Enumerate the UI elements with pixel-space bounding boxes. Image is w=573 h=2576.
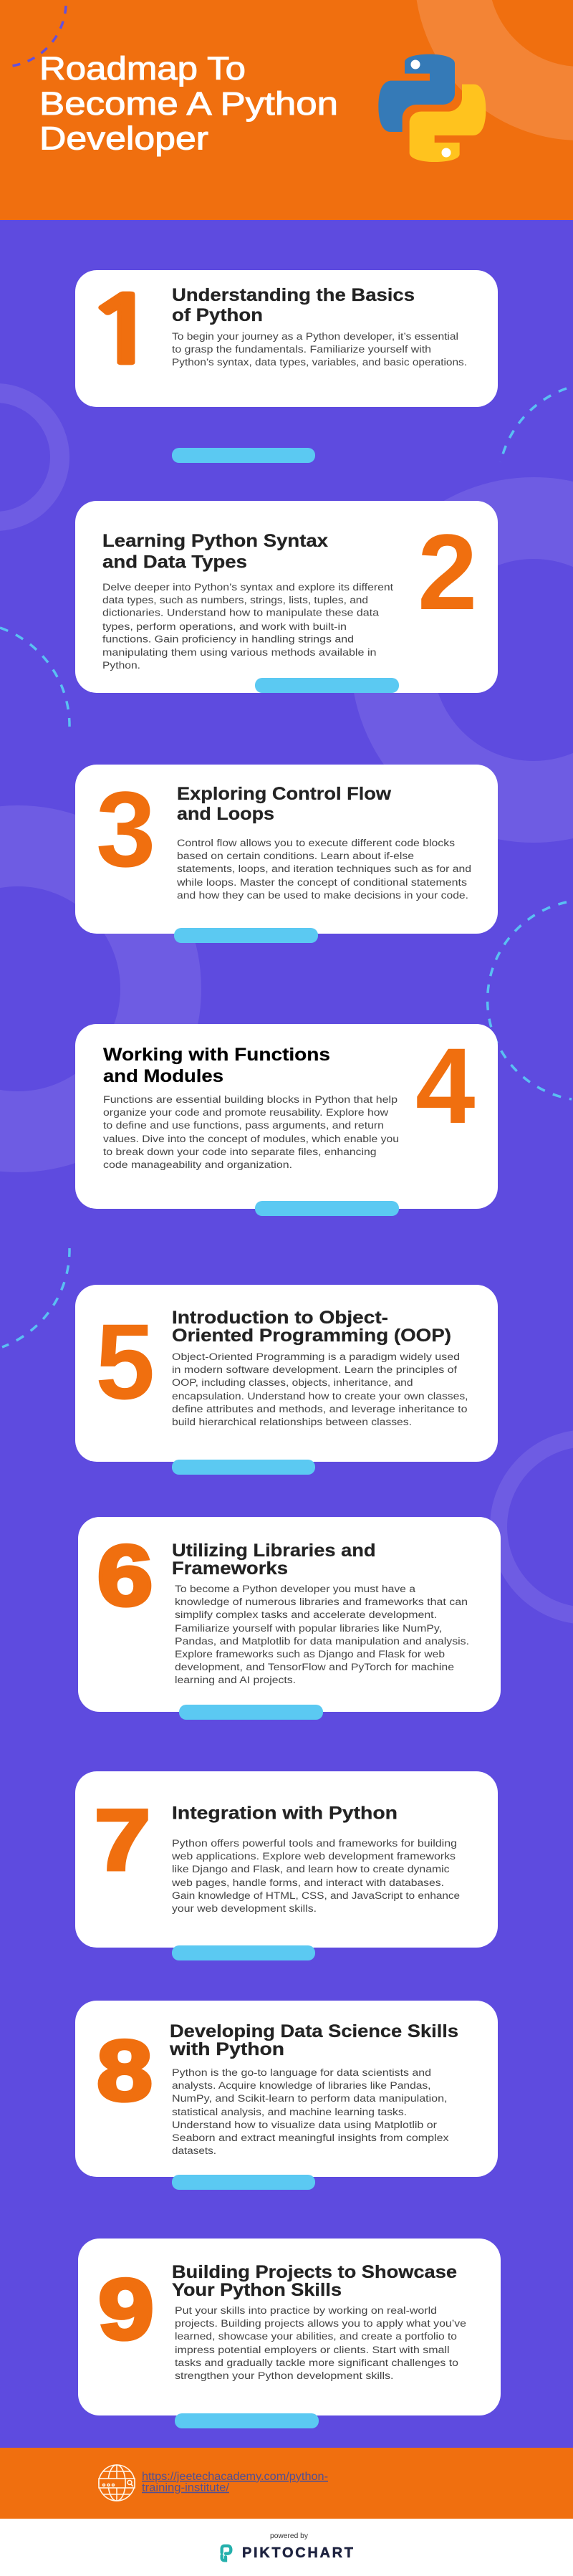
heading: Developing Data Science Skills [170, 2021, 458, 2041]
body text: to define and use functions, pass arguments, and return [103, 1120, 384, 1131]
body text: Put your skills into practice by working on real-world [175, 2305, 437, 2317]
body text: statements, loops, and iteration techniques such as for and [177, 863, 471, 875]
body text: Seaborn and extract meaningful insights from complex [172, 2132, 448, 2144]
panel: step 9 [78, 2239, 501, 2428]
pill [179, 1705, 323, 1720]
icon: piktochart mark [222, 2546, 231, 2560]
body text [175, 2305, 466, 2382]
heading: and Data Types [102, 552, 247, 572]
link: training-institute/ [142, 2482, 230, 2494]
body text: web pages, handle forms, and interact with databases. [171, 1877, 444, 1889]
body text: Python offers powerful tools and frameworks for building [172, 1838, 457, 1849]
body text: dictionaries. Understand how to manipulate these data [102, 608, 379, 619]
number 8: 8 [97, 2023, 153, 2119]
heading: Your Python Skills [172, 2280, 342, 2300]
body text: datasets. [172, 2145, 216, 2157]
body text [172, 1351, 468, 1428]
body text: Familiarize yourself with popular libraries like NumPy, [175, 1623, 442, 1634]
body text: encapsulation. Understand how to create your own classes, [172, 1391, 468, 1402]
number 6: 6 [97, 1528, 153, 1624]
body text: Gain knowledge of HTML, CSS, and JavaScript to enhance [172, 1890, 460, 1902]
heading: with Python [169, 2039, 284, 2059]
body text: and how they can be used to make decisions in your code. [177, 890, 468, 901]
body text: Pandas, and Matplotlib for data manipulation and analysis. [175, 1636, 469, 1647]
body text [172, 331, 467, 368]
body text [172, 2067, 448, 2157]
body text: data types, such as numbers, strings, lists, tuples, and [102, 595, 368, 606]
body text: projects. Building projects allows you to apply what you’ve [175, 2318, 466, 2330]
heading: Integration with Python [172, 1803, 398, 1823]
heading: Understanding the Basics [172, 285, 415, 305]
body text: build hierarchical relationships between classes. [172, 1417, 412, 1428]
body text: development, and TensorFlow and PyTorch for machine [175, 1662, 454, 1673]
pill [175, 2413, 319, 2428]
panel: step 5 [75, 1285, 498, 1475]
body text: Python. [102, 660, 140, 671]
pill [255, 1201, 399, 1216]
heading: and Modules [103, 1066, 223, 1086]
link [142, 2471, 328, 2494]
heading [172, 2262, 457, 2300]
footer band [0, 2448, 573, 2519]
body text: web applications. Explore web development frameworks [171, 1851, 456, 1862]
body text: NumPy, and Scikit-learn to perform data manipulation, [172, 2093, 447, 2105]
body text [176, 838, 471, 901]
body text: OOP, including classes, objects, inheritance, and [172, 1377, 413, 1389]
panel: step 3 [75, 765, 498, 943]
body text: while loops. Master the concept of conditional statements [176, 877, 467, 889]
body text: like Django and Flask, and learn how to create dynamic [172, 1864, 450, 1875]
number 3: 3 [96, 769, 155, 889]
heading: Utilizing Libraries and [172, 1541, 375, 1561]
body text: Python’s syntax, data types, variables, and basic operations. [172, 357, 467, 368]
body text: define attributes and methods, and leverage inheritance to [172, 1404, 468, 1415]
body text: your web development skills. [172, 1903, 317, 1915]
body text: types, perform operations, and work with built-in [102, 621, 347, 633]
body text [171, 1838, 460, 1915]
body text: to grasp the fundamentals. Familiarize yourself with [172, 344, 431, 355]
panel: step 6 [78, 1517, 501, 1720]
body text: code manageability and organization. [103, 1159, 292, 1171]
body text [175, 1584, 469, 1686]
panel: step 7 [75, 1771, 498, 1960]
body text: Delve deeper into Python’s syntax and explore its different [102, 582, 393, 593]
body text: values. Dive into the concept of modules, which enable you [103, 1134, 399, 1145]
panel: step 1 [75, 270, 498, 463]
heading [172, 1308, 451, 1346]
body text: Explore frameworks such as Django and Flask for web [175, 1649, 445, 1660]
piktochart wordmark: PIKTOCHART [242, 2545, 353, 2561]
body text: Functions are essential building blocks in Python that help [103, 1094, 398, 1106]
heading [102, 531, 328, 572]
heading [172, 285, 415, 325]
pill [255, 678, 399, 693]
heading: and Loops [177, 804, 274, 824]
body text: organize your code and promote reusability. Explore how [103, 1107, 389, 1119]
pill [172, 1460, 315, 1475]
number 5: 5 [95, 1301, 155, 1422]
heading: Oriented Programming (OOP) [172, 1326, 451, 1346]
number 9: 9 [98, 2261, 154, 2357]
heading [169, 2021, 458, 2059]
body text [103, 1094, 399, 1171]
body text: in modern software development. Learn the principles of [172, 1364, 457, 1376]
powered by: powered by [270, 2532, 309, 2540]
heading [172, 1541, 375, 1579]
heading: of Python [172, 305, 263, 325]
number 2: 2 [418, 512, 477, 632]
body text: Object-Oriented Programming is a paradigm widely used [172, 1351, 460, 1363]
body text: analysts. Acquire knowledge of libraries like Pandas, [172, 2080, 431, 2092]
heading [103, 1045, 330, 1086]
body text: impress potential employers or clients. Start with small [175, 2345, 450, 2356]
title: Become A Python [39, 85, 338, 122]
body text: functions. Gain proficiency in handling strings and [102, 633, 354, 645]
body text: Understand how to visualize data using Matplotlib or [172, 2120, 437, 2131]
heading: Exploring Control Flow [177, 784, 392, 804]
link: https://jeetechacademy.com/python- [142, 2471, 328, 2483]
body text: tasks and gradually tackle more significant challenges to [175, 2357, 458, 2369]
body text: Python is the go-to language for data scientists and [172, 2067, 431, 2079]
heading: Introduction to Object- [172, 1308, 388, 1328]
body text: based on certain conditions. Learn about if-else [177, 851, 414, 862]
panel: step 8 [75, 2001, 498, 2190]
body text: knowledge of numerous libraries and frameworks that can [175, 1596, 468, 1608]
body text: learning and AI projects. [175, 1675, 296, 1686]
heading: Learning Python Syntax [102, 531, 328, 551]
pill [172, 448, 315, 463]
body text [102, 582, 393, 671]
body text: to break down your code into separate files, enhancing [103, 1146, 377, 1158]
heading: Frameworks [172, 1558, 288, 1579]
body text: learned, showcase your abilities, and create a portfolio to [175, 2331, 457, 2342]
body text: strengthen your Python development skills. [175, 2370, 394, 2382]
body text: To begin your journey as a Python developer, it’s essential [172, 331, 458, 343]
title [39, 50, 338, 156]
footer credit: powered by piktochart [0, 2519, 573, 2576]
number 4: 4 [415, 1025, 475, 1146]
pill [172, 2175, 315, 2190]
header banner [0, 0, 573, 220]
body text: manipulating them using various methods available in [102, 647, 377, 659]
panel: step 4 [75, 1024, 498, 1216]
icon: python logo [378, 54, 486, 162]
title: Roadmap To [39, 50, 246, 87]
panel: step 2 [75, 501, 498, 693]
pill [172, 1945, 315, 1960]
title: Developer [39, 120, 208, 156]
heading [177, 784, 392, 824]
pill [174, 928, 318, 943]
icon: globe with search bar [99, 2465, 135, 2501]
body text: To become a Python developer you must have a [175, 1584, 415, 1595]
body text: statistical analysis, and machine learning tasks. [172, 2107, 407, 2118]
body text: Control flow allows you to execute different code blocks [177, 838, 455, 849]
number 1: 1 [84, 285, 163, 378]
heading: Building Projects to Showcase [172, 2262, 457, 2282]
number 7: 7 [95, 1792, 150, 1888]
heading: Working with Functions [103, 1045, 330, 1065]
body text: simplify complex tasks and accelerate development. [175, 1609, 437, 1621]
